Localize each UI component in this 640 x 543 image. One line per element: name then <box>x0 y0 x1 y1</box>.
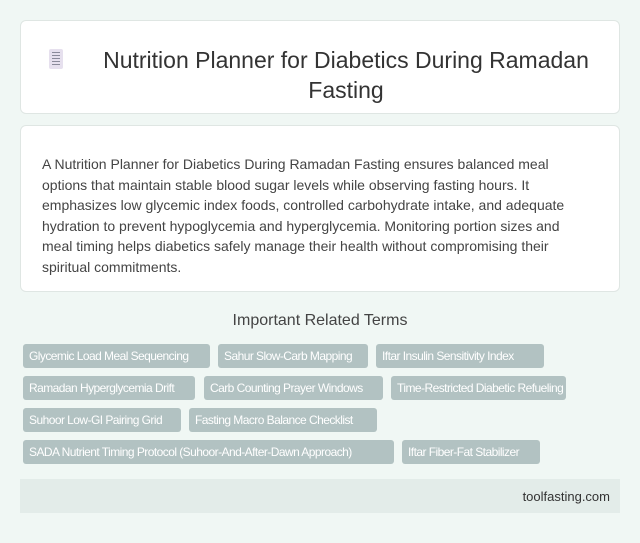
tags: Glycemic Load Meal Sequencing <box>29 349 188 363</box>
icon: document <box>49 49 63 69</box>
tags: Suhoor Low-GI Pairing Grid <box>29 413 162 427</box>
tags: Fasting Macro Balance Checklist <box>195 413 353 427</box>
section heading: Important Related Terms <box>233 312 407 329</box>
tags: Carb Counting Prayer Windows <box>210 381 363 395</box>
title: Nutrition Planner for Diabetics During Ramadan Fasting <box>103 47 589 103</box>
footer text: toolfasting.com <box>523 489 610 504</box>
description text: A Nutrition Planner for Diabetics During Ramadan Fasting ensures balanced meal options that maintain stable blood sugar levels while observing fasting hours. It emphasizes low glycemic index foods, controlled carbohydrate intake, and adequate hydration to prevent hypoglycemia and hyperglycemia. Monitoring portion sizes and meal timing helps diabetics safely manage their health without compromising their spiritual commitments. <box>42 156 564 274</box>
tags: Time-Restricted Diabetic Refueling <box>397 381 563 395</box>
description card <box>20 125 620 292</box>
tags: Sahur Slow-Carb Mapping <box>224 349 352 363</box>
tags: Iftar Fiber-Fat Stabilizer <box>408 445 519 459</box>
header card <box>20 20 620 114</box>
footer <box>20 479 620 513</box>
tags: Ramadan Hyperglycemia Drift <box>29 381 174 395</box>
tags: Iftar Insulin Sensitivity Index <box>382 349 514 363</box>
tags: SADA Nutrient Timing Protocol (Suhoor-And-After-Dawn Approach) <box>29 445 352 459</box>
